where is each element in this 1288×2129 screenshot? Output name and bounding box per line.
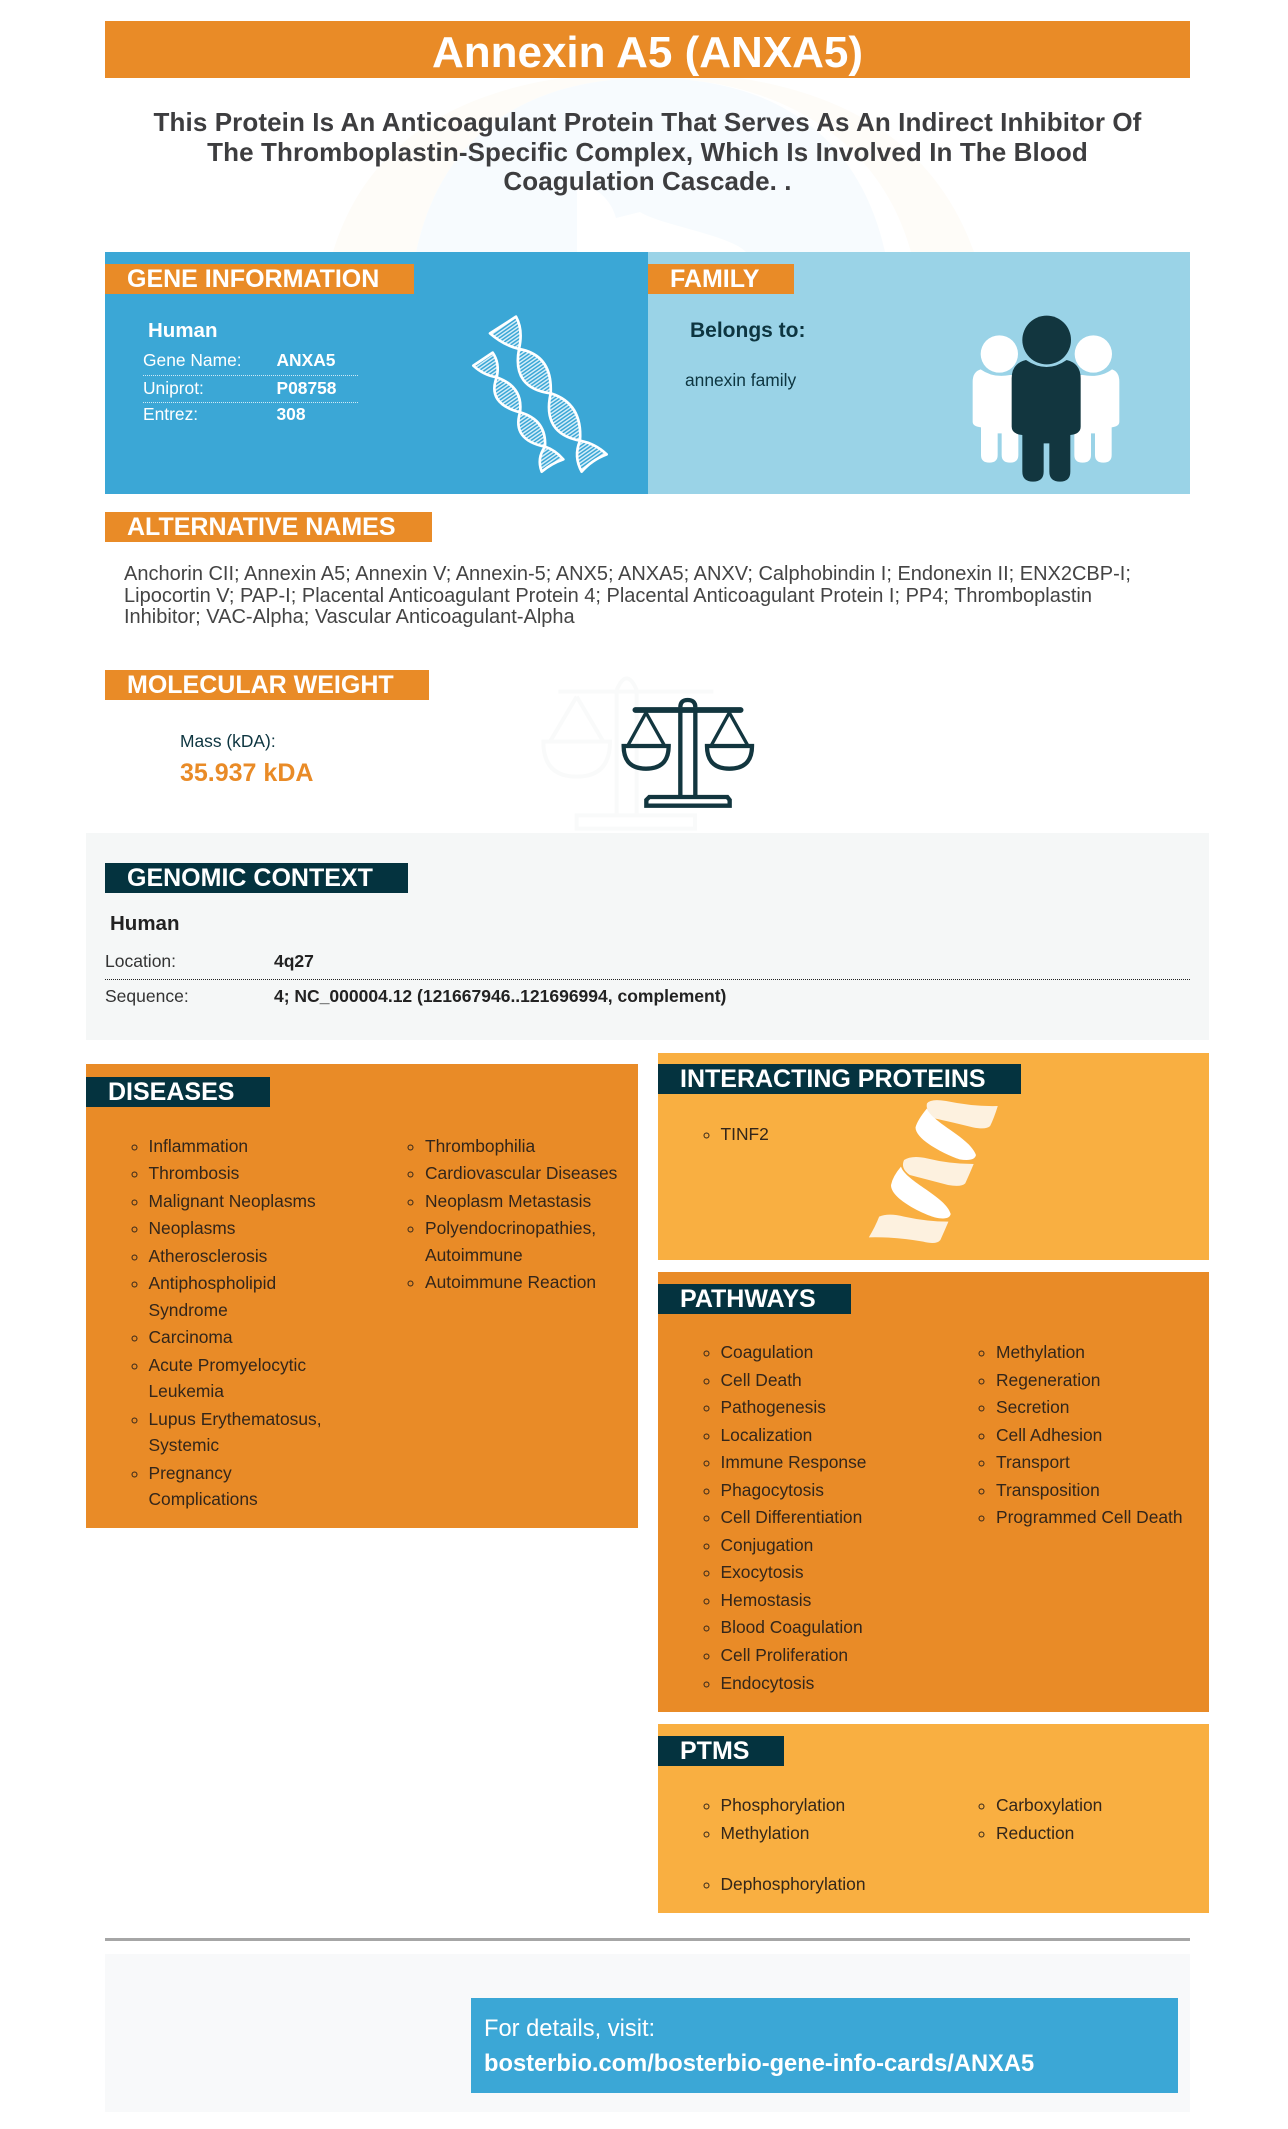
heading: gene information: GENE INFORMATION (127, 265, 379, 293)
list: diseases column 2: Autoimmune Reaction (425, 1272, 596, 1292)
list: pathways column 1: Endocytosis (720, 1673, 814, 1693)
heading: pathways (658, 1284, 851, 1314)
heading: diseases: DISEASES (108, 1078, 234, 1106)
list: pathways column 2: Cell Adhesion (996, 1425, 1102, 1445)
details label: For details, visit: (484, 2016, 655, 2042)
row: sequence: Sequence: (105, 986, 189, 1006)
list: diseases column 1: Lupus Erythematosus, Systemic (148, 1409, 322, 1455)
row: gene name: Gene Name: (143, 350, 242, 370)
list: pathways column 1: Pathogenesis (720, 1397, 826, 1417)
list: pathways column 2: Programmed Cell Death (996, 1507, 1183, 1527)
list: pathways column 1: Coagulation (720, 1342, 813, 1362)
row: gene name: ANXA5 (276, 350, 335, 370)
title banner: Annexin A5 (ANXA5) (432, 28, 863, 77)
species label: Human (148, 319, 217, 342)
list: diseases column 1: Malignant Neoplasms (148, 1191, 316, 1211)
alternative names text: Inhibitor; VAC-Alpha; Vascular Anticoagulant-Alpha (124, 606, 575, 628)
row: gene name (143, 348, 358, 376)
heading: diseases (86, 1077, 270, 1107)
list: ptms column 1 (704, 1795, 866, 1894)
row: sequence: 4; NC_000004.12 (121667946..121696994, complement) (274, 986, 726, 1006)
row: uniprot: P08758 (276, 378, 336, 398)
list: diseases column 1: Inflammation (148, 1136, 248, 1156)
icon: dna helices (472, 315, 608, 474)
mass label: Mass (kDA): (180, 731, 276, 751)
icon: people (972, 316, 1120, 482)
subtitle description: This Protein Is An Anticoagulant Protein That Serves As An Indirect Inhibitor Of (154, 107, 1141, 137)
list: ptms column 2: Carboxylation (996, 1795, 1102, 1815)
list: diseases column 1: Carcinoma (148, 1327, 233, 1347)
list: pathways column 1: Blood Coagulation (720, 1617, 863, 1637)
subtitle description (154, 107, 1142, 196)
list: diseases column 1: Antiphospholipid Syndrome (148, 1273, 276, 1320)
list: diseases column 1: Thrombosis (148, 1163, 239, 1183)
heading: family: FAMILY (670, 265, 759, 293)
heading: molecular weight: MOLECULAR WEIGHT (127, 671, 394, 699)
list: ptms column 1: Dephosphorylation (720, 1874, 866, 1894)
title banner (105, 21, 1190, 78)
list: diseases column 1: Acute Promyelocytic Leukemia (148, 1355, 306, 1401)
list: pathways column 1: Immune Response (720, 1452, 866, 1472)
list: diseases column 2: Polyendocrinopathies, Autoimmune (425, 1218, 596, 1265)
list: diseases column 2: Neoplasm Metastasis (425, 1191, 591, 1211)
panel: interacting proteins (658, 1053, 1209, 1260)
row: entrez: 308 (276, 404, 306, 424)
list: pathways column 1: Cell Death (720, 1370, 802, 1390)
icon: protein ribbon (868, 1100, 998, 1243)
background watermark: logo arches (0, 0, 1288, 260)
row: location (105, 949, 1190, 980)
icon: balance scale (622, 698, 754, 808)
row: entrez: Entrez: (143, 404, 198, 424)
list: ptms column 2 (978, 1795, 1102, 1843)
callout: details link (471, 1998, 1178, 2093)
panel: ptms (658, 1724, 1209, 1913)
row: uniprot (143, 376, 358, 403)
panel: diseases (86, 1064, 638, 1528)
heading: alternative names: ALTERNATIVE NAMES (127, 513, 396, 541)
list: pathways column 2: Secretion (996, 1397, 1069, 1417)
heading: ptms: PTMS (680, 1737, 749, 1765)
details url: bosterbio.com/bosterbio-gene-info-cards/ANXA5 (484, 2051, 1034, 2077)
heading: interacting proteins: INTERACTING PROTEINS (680, 1065, 986, 1093)
subtitle description: The Thromboplastin-Specific Complex, Which Is Involved In The Blood (207, 136, 1088, 166)
list: diseases column 2: Thrombophilia (425, 1136, 535, 1156)
list: ptms column 1: Methylation (720, 1823, 809, 1843)
mass value: 35.937 kDA (180, 759, 313, 787)
list: pathways column 1: Exocytosis (720, 1562, 804, 1582)
panel: genomic context (86, 833, 1209, 1040)
subtitle description: Coagulation Cascade. . (503, 166, 792, 196)
list: ptms column 1: Phosphorylation (720, 1795, 845, 1815)
family value: annexin family (685, 370, 796, 390)
list: pathways column 1 (704, 1342, 866, 1693)
list: pathways column 2: Transport (996, 1452, 1070, 1472)
list: pathways column 2: Methylation (996, 1342, 1085, 1362)
list: pathways column 1: Cell Proliferation (720, 1645, 848, 1665)
list: diseases column 1: Pregnancy Complications (148, 1463, 258, 1509)
list: diseases column 1: Neoplasms (148, 1218, 236, 1238)
panel: family (648, 252, 1190, 494)
belongs to label: Belongs to: (690, 319, 806, 342)
heading: ptms (658, 1736, 784, 1766)
alternative names text: Lipocortin V; PAP-I; Placental Anticoagulant Protein 4; Placental Anticoagulant Protein I; PP4; Thromboplastin (124, 584, 1092, 606)
row: entrez (143, 404, 306, 424)
list: diseases column 1 (132, 1136, 322, 1509)
panel: pathways (658, 1272, 1209, 1712)
list: ptms column 2: Reduction (996, 1823, 1074, 1843)
list: pathways column 1: Localization (720, 1425, 812, 1445)
list: pathways column 2: Transposition (996, 1480, 1100, 1500)
list: diseases column 2 (408, 1136, 617, 1292)
species label: Human (110, 912, 179, 935)
row: location: 4q27 (274, 951, 314, 971)
row: uniprot: Uniprot: (143, 378, 204, 398)
list: pathways column 2: Regeneration (996, 1370, 1100, 1390)
list: pathways column 1: Hemostasis (720, 1590, 811, 1610)
list: pathways column 1: Cell Differentiation (720, 1507, 862, 1527)
row: location: Location: (105, 951, 176, 971)
panel: gene information (105, 252, 648, 494)
heading: family (648, 264, 794, 294)
list: diseases column 2: Cardiovascular Diseases (425, 1163, 617, 1183)
heading: genomic context: GENOMIC CONTEXT (127, 864, 373, 892)
icon: faint balance scale (520, 670, 780, 840)
list: pathways column 1: Phagocytosis (720, 1480, 824, 1500)
list: interacting proteins: TINF2 (720, 1124, 769, 1144)
alternative names text: Anchorin CII; Annexin A5; Annexin V; Annexin-5; ANX5; ANXA5; ANXV; Calphobindin I; Endonexin II; ENX2CBP-I; (124, 563, 1131, 585)
list: diseases column 1: Atherosclerosis (148, 1246, 267, 1266)
alternative names text (124, 563, 1131, 628)
list: pathways column 1: Conjugation (720, 1535, 813, 1555)
panel: footer (105, 1954, 1190, 2112)
list: pathways column 2 (978, 1342, 1183, 1527)
heading: pathways: PATHWAYS (680, 1285, 816, 1313)
